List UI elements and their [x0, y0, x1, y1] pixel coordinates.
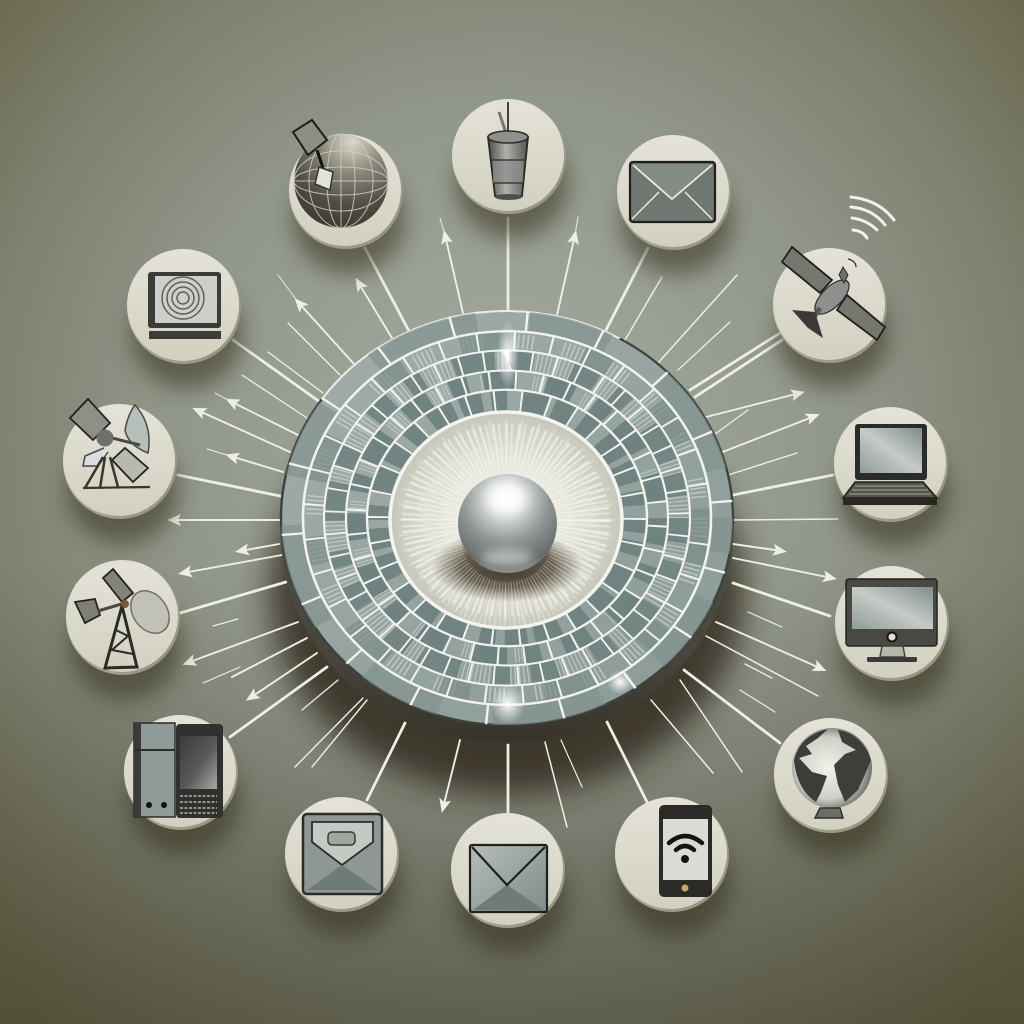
icon: globe with solar panel: [289, 120, 405, 274]
icon: satellite with wifi signal: [773, 197, 894, 388]
shadow spikes: [437, 465, 577, 605]
icon: envelope bottom centre: [451, 813, 567, 953]
icon: earth globe: [774, 718, 890, 858]
icon: desktop monitor: [835, 566, 951, 706]
wifi signal: [851, 197, 894, 238]
chrome sphere: [458, 474, 557, 573]
arrows bottom right: [651, 544, 832, 773]
disc cast shadow: [269, 385, 745, 795]
connector lines to icons: [178, 218, 833, 812]
arrows top left: [172, 218, 463, 520]
connector lines and arrows: [172, 217, 838, 827]
sphere contact shadow: [431, 530, 583, 602]
radiating rays: [408, 429, 604, 611]
icon: satellite dish with panels: [63, 399, 179, 544]
icon: phone with wifi: [615, 797, 731, 937]
arrows bottom left: [183, 544, 582, 827]
icon: cup with straw: [452, 99, 568, 239]
central disc: [281, 311, 733, 742]
disc side wall: [281, 328, 733, 742]
icon: tower with panels and dish: [66, 560, 182, 700]
icon: phones: [124, 715, 240, 855]
icon: envelope top right: [617, 135, 733, 275]
ring lines: [303, 331, 711, 705]
top highlight: [497, 321, 519, 389]
fine hatching: [335, 360, 679, 676]
icon: monitor with fingerprint: [127, 249, 243, 389]
icon: envelope with label: [285, 797, 401, 937]
radial dividers: [292, 321, 722, 715]
disc top face: [281, 311, 733, 725]
arrows top right: [557, 217, 838, 520]
lower right highlight: [607, 670, 633, 694]
inner white well: [390, 412, 622, 628]
dark sectors: [335, 360, 679, 676]
icon: laptop: [834, 407, 950, 547]
bottom highlight: [491, 684, 525, 724]
